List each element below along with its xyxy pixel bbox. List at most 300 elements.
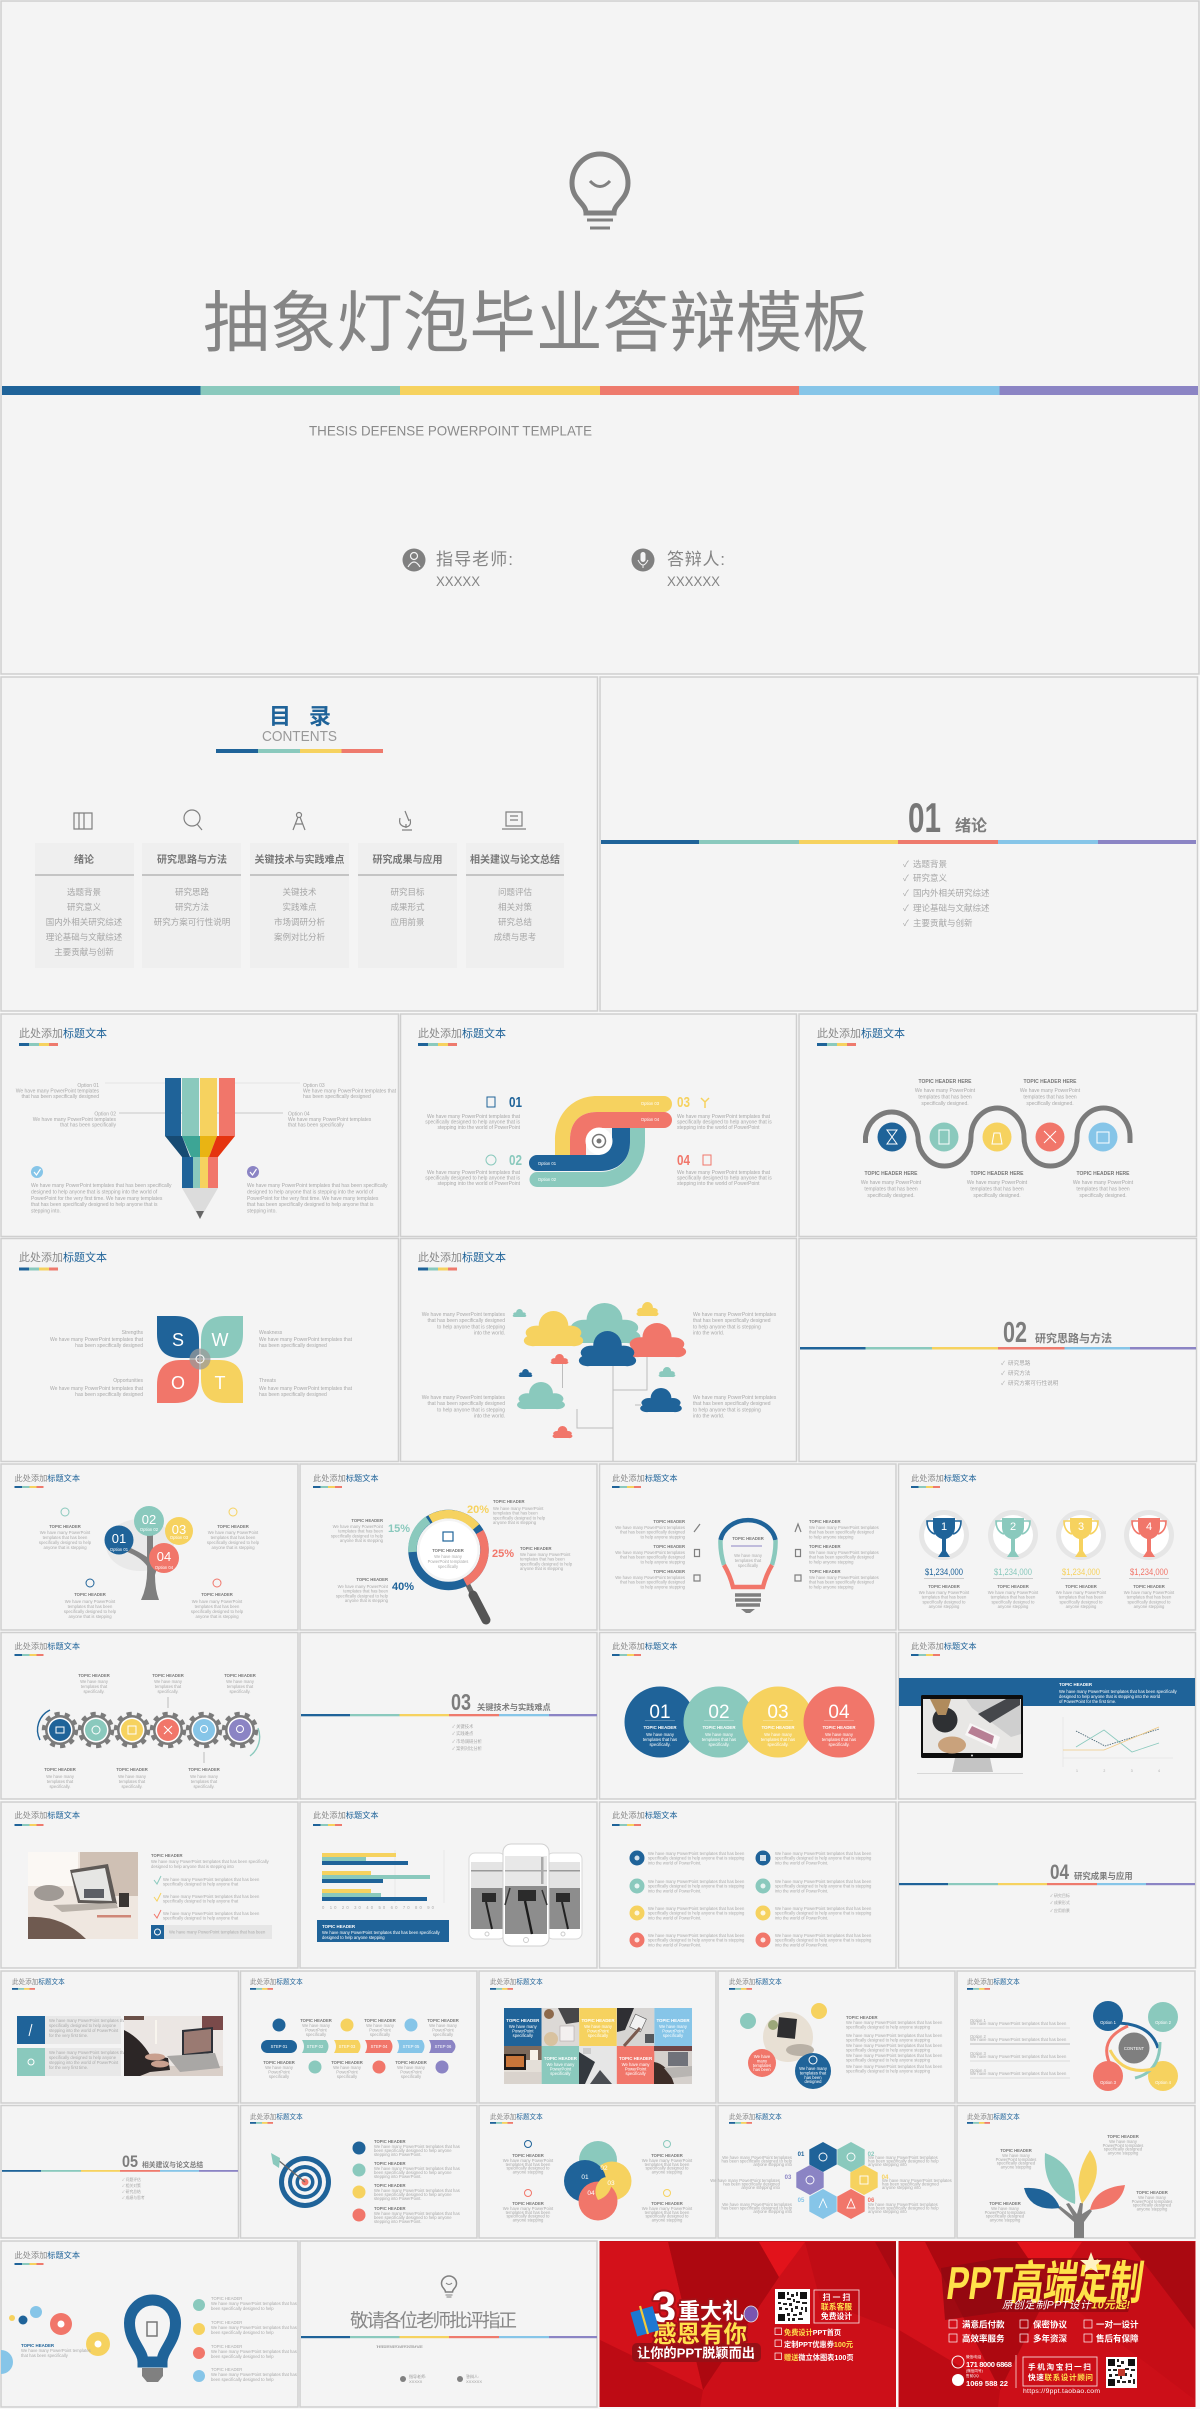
mini bar — [612, 1824, 641, 1826]
panel: venn diagram — [479, 2106, 716, 2238]
wave line — [866, 1108, 1130, 1166]
mini bar — [817, 1043, 856, 1046]
note blocks: specifically designed to help anyone — [49, 2055, 117, 2060]
chain segments: STEP 02 — [307, 2044, 324, 2049]
mini bar — [418, 1043, 457, 1046]
circle 04: TOPIC HEADER — [822, 1725, 856, 1730]
chain segments: STEP 03 — [339, 2044, 356, 2049]
left items: to help anyone stepping — [641, 1534, 686, 1539]
right items: TOPIC HEADER — [809, 1519, 841, 1524]
wave labels: TOPIC HEADER HERE — [1024, 1079, 1077, 1085]
mini bar — [911, 1486, 940, 1488]
defender block: 答辩人: — [667, 550, 725, 569]
cloud text: to help anyone that is stepping — [437, 1407, 505, 1413]
wave labels: We have many PowerPoint — [861, 1180, 922, 1186]
side list: Option 3 — [970, 2051, 987, 2056]
circle 04: 04 — [828, 1702, 850, 1723]
cloud text — [422, 1312, 777, 1420]
target items: been specifically designed to help anyone — [374, 2192, 452, 2197]
wave labels: We have many PowerPoint — [967, 1180, 1028, 1186]
scan box: 联系客服 — [821, 2302, 852, 2312]
mosaic text: specifically — [513, 2033, 534, 2038]
side list: Option 2 — [970, 2034, 987, 2039]
checklist text: We have many PowerPoint templates that has been specifically — [151, 1859, 270, 1864]
column: 相关建议与论文总结: 问题评估 — [498, 887, 532, 897]
wave labels: templates that has been — [1076, 1186, 1130, 1192]
right items: to help anyone stepping — [809, 1559, 854, 1564]
paragraphs: designed to help anyone that is stepping into the world of — [31, 1189, 158, 1195]
list: ✓ 相关对策 — [122, 2183, 141, 2188]
advisor block — [402, 548, 513, 589]
bulb note: We have many PowerPoint templates — [21, 2348, 91, 2353]
side list: We have many PowerPoint templates that has been — [970, 2054, 1067, 2059]
right items: We have many PowerPoint templates that has — [211, 2349, 297, 2354]
side list: Option 4 — [970, 2068, 987, 2073]
hexagon text: We have many PowerPoint templates — [868, 2155, 938, 2160]
checklist text: specifically designed to help anyone that — [163, 1898, 239, 1904]
hexagons — [796, 2142, 878, 2219]
right items: that has been specifically designed — [809, 1530, 875, 1535]
chain text: TOPIC HEADER — [364, 2018, 396, 2023]
target items: been specifically designed to help anyone — [374, 2170, 452, 2175]
defender block: XXXXXX — [667, 574, 720, 589]
QR code — [1106, 2357, 1137, 2388]
trophy 4: templates that has been — [1127, 1595, 1172, 1600]
chain text: specifically — [269, 2074, 290, 2079]
circle 02: specifically. — [708, 1742, 730, 1747]
chain text — [263, 2018, 459, 2079]
blue bulb — [130, 2300, 176, 2382]
chain segments: STEP 05 — [403, 2044, 420, 2049]
chain segments — [261, 2018, 456, 2074]
slide title: 此处添加标题文本 — [612, 1641, 678, 1651]
item text: specifically designed to help anyone that is stepping — [648, 1856, 745, 1861]
item text: specifically designed to help anyone that is stepping — [648, 1884, 745, 1889]
cycle diagram: CONTENT — [1124, 2046, 1145, 2051]
tree labels: We have many PowerPoint — [65, 1599, 116, 1604]
venn text: specifically designed to — [645, 2214, 689, 2219]
chain text: PowerPoint — [369, 2028, 392, 2032]
item text — [648, 1851, 872, 1947]
column: 相关建议与论文总结: 相关建议与论文总结 — [470, 853, 560, 866]
swot labels: We have many PowerPoint templates that — [259, 1386, 353, 1392]
side list — [970, 2018, 1070, 2078]
venn text: templates that has been — [645, 2162, 690, 2167]
item text: into the world of PowerPoint. — [775, 1888, 828, 1893]
item text: We have many PowerPoint templates that has been — [775, 1879, 872, 1884]
panel: four circles — [600, 1632, 896, 1799]
tree labels — [39, 1508, 260, 1619]
paragraphs: We have many PowerPoint templates that has been specifically — [247, 1183, 388, 1189]
trophy 4 — [1124, 1510, 1175, 1609]
chain text: TOPIC HEADER — [300, 2018, 332, 2023]
item text: We have many PowerPoint templates that has been — [648, 1851, 745, 1856]
colour bar — [800, 1347, 1196, 1350]
chain text: We have many — [397, 2065, 426, 2070]
slide title: 此处添加标题文本 — [911, 1641, 977, 1651]
tree labels: We have many PowerPoint — [192, 1599, 243, 1604]
bulb text: templates that — [735, 1558, 762, 1563]
venn circles: 04 — [587, 2190, 595, 2197]
slide title: 此处添加标题文本 — [490, 2112, 543, 2121]
trophy 3: TOPIC HEADER — [1065, 1584, 1097, 1589]
circle cluster: templates that — [800, 2070, 827, 2075]
body text: We have many PowerPoint templates that — [677, 1170, 771, 1176]
wave labels: TOPIC HEADER HERE — [865, 1171, 918, 1177]
stems — [562, 1357, 647, 1461]
wave labels: templates that has been — [864, 1186, 918, 1192]
checklist text: specifically designed to help anyone that — [163, 1916, 239, 1920]
cycle diagram: Option 2 — [1155, 2020, 1172, 2025]
tree: Option 04 — [155, 1565, 174, 1570]
tree labels: TOPIC HEADER — [49, 1524, 81, 1529]
tree labels: specifically designed to help — [39, 1540, 92, 1545]
side text: specifically designed to help anyone stepping — [846, 2058, 931, 2063]
swot labels: has been specifically designed — [75, 1343, 143, 1349]
leaf text: We have many — [1002, 2153, 1031, 2158]
checklist text: We have many PowerPoint templates that has been — [163, 1894, 260, 1899]
panel: contents — [1, 677, 598, 1011]
list — [1050, 1892, 1070, 1913]
list: 研究方法 — [1008, 1369, 1031, 1377]
left items: We have many PowerPoint templates — [615, 1525, 685, 1530]
list: ✓ 案例对比分析 — [452, 1745, 483, 1752]
chain segments: STEP 04 — [371, 2044, 388, 2049]
mini bar — [967, 1988, 990, 1990]
callout text: TOPIC HEADER — [493, 1499, 525, 1504]
trophy 4: TOPIC HEADER — [1133, 1584, 1165, 1589]
list: 研究方案可行性说明 — [1008, 1379, 1059, 1387]
contact details — [952, 2354, 1016, 2388]
scan box — [1023, 2357, 1097, 2386]
column: 关键技术与实践难点: 实践难点 — [282, 902, 317, 912]
section number: 04 — [1050, 1861, 1069, 1884]
circle 03 — [742, 1686, 814, 1758]
bulb — [720, 1520, 776, 1613]
right items: been specifically designed to help — [211, 2354, 274, 2359]
mini bar — [19, 1043, 58, 1046]
icon: gift box — [630, 2306, 659, 2336]
leaf text: anyone stepping — [1108, 2150, 1139, 2155]
bulb text: TOPIC HEADER — [732, 1536, 764, 1541]
leaf text: We have many — [1109, 2139, 1138, 2144]
body text: We have many PowerPoint templates that — [677, 1114, 771, 1120]
venn text: TOPIC HEADER — [512, 2153, 544, 2158]
mini bar — [14, 2263, 44, 2265]
swot labels: Threats — [259, 1378, 276, 1384]
side text: We have many PowerPoint templates that has been — [846, 2020, 943, 2025]
hexagon text: anyone stepping into — [882, 2185, 921, 2190]
leaf text: We have many — [1138, 2195, 1167, 2200]
checklist text — [151, 1853, 270, 1920]
gift headline: 让你的PPT脱颖而出 — [637, 2344, 755, 2360]
slide title: 此处添加标题文本 — [729, 2112, 782, 2121]
magnifier: TOPIC HEADER — [432, 1548, 464, 1553]
mini bar — [19, 1268, 58, 1270]
headline — [941, 2252, 1147, 2320]
trophy 3 — [1056, 1510, 1107, 1609]
trophy 1: $1,234,000 — [925, 1567, 963, 1578]
options text — [16, 1083, 397, 1128]
slide title: 此处添加标题文本 — [967, 2112, 1020, 2121]
note blocks: stepping into the world of PowerPoint — [49, 2028, 119, 2033]
tree labels: We have many PowerPoint — [40, 1530, 91, 1535]
target items: stepping into PowerPoint. — [374, 2152, 422, 2157]
leaf text: specifically designed — [1104, 2147, 1143, 2152]
circle 03: 03 — [767, 1702, 789, 1723]
item text: specifically designed to help anyone that is stepping — [775, 1938, 872, 1943]
options text: We have many PowerPoint templates — [33, 1117, 116, 1123]
tree labels: templates that has been — [43, 1535, 88, 1540]
list — [122, 2177, 145, 2200]
venn text: templates that has been — [645, 2210, 690, 2215]
right items: been specifically designed to help — [211, 2330, 274, 2335]
hexagon text: has been specifically designed to help — [721, 2159, 793, 2164]
panel: red promo custom design — [898, 2241, 1196, 2407]
slide title: 此处添加标题文本 — [612, 1473, 678, 1483]
chain text: specifically — [337, 2074, 358, 2079]
chain text: specifically — [370, 2032, 391, 2037]
venn circles: 03 — [607, 2180, 615, 2187]
numbered items — [486, 1094, 711, 1169]
list: 研究思路 — [1008, 1359, 1031, 1367]
side list: We have many PowerPoint templates that has been — [970, 2071, 1067, 2076]
hexagon text: We have many PowerPoint templates — [722, 2155, 792, 2160]
options text: Option 03 — [303, 1083, 325, 1089]
venn circles — [564, 2141, 632, 2220]
options text: that has been specifically — [60, 1122, 116, 1128]
slide title: 此处添加标题文本 — [12, 1977, 65, 1986]
panel: section 04 — [898, 1802, 1196, 1968]
chain text: PowerPoint — [432, 2028, 455, 2032]
bulb note — [21, 2343, 91, 2358]
mini bar — [250, 1988, 273, 1990]
checklist text: We have many PowerPoint templates that has been — [163, 1911, 260, 1916]
cloud text: that has been specifically designed — [693, 1318, 771, 1324]
chart note: We have many PowerPoint templates that has been specifically — [322, 1930, 441, 1935]
mosaic text: specifically — [588, 2033, 609, 2038]
gear labels: templates that — [227, 1684, 254, 1689]
body text: specifically designed to help anyone that is — [677, 1119, 772, 1125]
right items: We have many PowerPoint templates — [809, 1550, 879, 1555]
leaf text: PowerPoint templates — [1132, 2199, 1172, 2204]
side text: specifically designed to help anyone stepping — [846, 2069, 931, 2074]
hexagon text: anyone stepping into — [753, 2209, 793, 2214]
bar chart — [322, 1850, 444, 1910]
slide title: 此处添加标题文本 — [19, 1250, 107, 1264]
service checklist: 高效率服务 — [962, 2334, 1005, 2344]
gear labels: specifically. — [229, 1689, 251, 1694]
circle 01: specifically. — [649, 1742, 671, 1747]
section title: 研究成果与应用 — [1074, 1871, 1133, 1881]
options text: Option 01 — [77, 1083, 99, 1089]
target icon — [271, 2153, 331, 2208]
list: ✓ — [1001, 1380, 1005, 1387]
slide title: 此处添加标题文本 — [490, 1977, 543, 1986]
callout text: We have many PowerPoint — [333, 1524, 384, 1529]
list: ✓ — [903, 859, 909, 869]
people: 指导老师: — [409, 2373, 426, 2379]
gift list: 赠送微立体图表100页 — [784, 2353, 854, 2362]
gear labels: TOPIC HEADER — [44, 1767, 76, 1772]
slide title: 此处添加标题文本 — [14, 2250, 80, 2260]
circle cluster: We have — [754, 2054, 771, 2059]
body text — [425, 1114, 772, 1187]
venn text: TOPIC HEADER — [651, 2201, 683, 2206]
gift headline: 感恩有你 — [653, 2320, 747, 2347]
mosaic text: TOPIC HEADER — [619, 2056, 653, 2061]
band diagram: Option 03 — [641, 1101, 660, 1106]
tree labels: anyone that is stepping — [211, 1545, 255, 1550]
right items: TOPIC HEADER — [211, 2296, 242, 2301]
subtitle: THESIS DEFENSE POWERPOINT TEMPLATE — [309, 422, 592, 438]
body text: specifically designed to help anyone that is — [425, 1175, 520, 1181]
hexagon text: We have many PowerPoint templates — [710, 2178, 780, 2183]
colour bar — [216, 749, 383, 753]
chain text: We have many — [429, 2023, 458, 2028]
line chart — [1063, 1717, 1173, 1767]
column: 相关建议与论文总结: 相关对策 — [498, 902, 532, 912]
numbered items: 04 — [677, 1152, 691, 1169]
callout text: anyone that is stepping — [520, 1566, 564, 1571]
note blocks: We have many PowerPoint templates that — [49, 2018, 128, 2023]
left items — [615, 1519, 700, 1589]
trophy 2: specifically designed to — [991, 1599, 1035, 1604]
left items: We have many PowerPoint templates — [615, 1575, 685, 1580]
callout text: specifically designed to help — [520, 1561, 573, 1566]
column: 研究思路与方法: 研究方案可行性说明 — [154, 917, 230, 927]
magnifier: PowerPoint templates — [428, 1559, 468, 1564]
left items: that has been specifically designed — [620, 1530, 686, 1535]
colour bar — [301, 1714, 597, 1716]
list: 选题背景 — [913, 859, 947, 869]
right items: We have many PowerPoint templates that has — [211, 2325, 297, 2330]
list: 研究意义 — [913, 873, 948, 883]
mini bar — [967, 2122, 990, 2124]
item text: into the world of PowerPoint. — [648, 1915, 701, 1920]
gear labels: specifically. — [49, 1784, 71, 1789]
item text: specifically designed to help anyone that is stepping — [775, 1884, 872, 1889]
numbered items: 03 — [677, 1094, 690, 1111]
options text: Option 04 — [288, 1112, 310, 1118]
icon: small bulb — [442, 2276, 456, 2297]
panel: section 01 — [600, 677, 1198, 1011]
venn circles: 01 — [581, 2174, 589, 2181]
mosaic text: PowerPoint — [625, 2066, 647, 2072]
circle 04: specifically. — [828, 1742, 850, 1747]
blue band: designed to help anyone that is stepping into the world — [1059, 1694, 1161, 1699]
leaf text: TOPIC HEADER — [1107, 2134, 1139, 2139]
chain text: specifically — [306, 2032, 327, 2037]
gift headline: 重大礼 — [678, 2299, 744, 2324]
venn text: We have many PowerPoint — [503, 2206, 554, 2211]
target items: been specifically designed to help anyone — [374, 2215, 452, 2220]
chain text: PowerPoint — [400, 2070, 423, 2074]
leaf text: We have many — [991, 2206, 1020, 2211]
heading: 目 录 — [269, 704, 331, 729]
band diagram — [529, 1096, 672, 1187]
chain text: We have many — [366, 2023, 395, 2028]
target items: been specifically designed to help anyone — [374, 2148, 452, 2153]
body text: stepping into the world of PowerPoint — [437, 1125, 521, 1131]
mini bar — [14, 1486, 44, 1488]
panel: SWOT — [1, 1238, 398, 1462]
chart labels: 1 2 3 4 — [1076, 1769, 1160, 1773]
list: ✓ 问题评估 — [122, 2177, 141, 2182]
scan box — [814, 2290, 859, 2323]
leaf text: anyone stepping — [990, 2217, 1021, 2222]
bulb text: specifically — [738, 1563, 759, 1568]
callout text: TOPIC HEADER — [351, 1518, 383, 1523]
trophy 4: specifically designed to — [1127, 1599, 1171, 1604]
list — [452, 1723, 483, 1752]
numbered items: 02 — [509, 1152, 522, 1169]
bulb note: that has been specifically — [21, 2353, 69, 2358]
side text — [846, 2015, 943, 2074]
colour bar — [2, 2170, 238, 2172]
item text: specifically designed to help anyone that is stepping — [648, 1938, 745, 1943]
paragraphs: that has been specifically designed to help anyone that is — [31, 1202, 158, 1208]
mosaic text: We have many — [546, 2062, 575, 2067]
cloud text: to help anyone that is stepping — [693, 1407, 761, 1413]
body text: We have many PowerPoint templates that — [427, 1170, 521, 1176]
mini bar — [729, 2122, 752, 2124]
chart note: TOPIC HEADER — [322, 1924, 356, 1929]
slide title: 此处添加标题文本 — [14, 1641, 80, 1651]
item text: into the world of PowerPoint. — [648, 1942, 701, 1947]
cloud text: that has been specifically designed — [427, 1401, 505, 1407]
tree labels: TOPIC HEADER — [74, 1592, 106, 1597]
panel: eight icon items — [600, 1802, 896, 1968]
list: ✓ 应用前景 — [1050, 1907, 1070, 1913]
venn circles: 02 — [600, 2165, 608, 2172]
note blocks: We have many PowerPoint templates that — [49, 2050, 128, 2055]
circle 02: 02 — [708, 1702, 730, 1723]
column: 关键技术与实践难点: 案例对比分析 — [274, 932, 325, 942]
colour bar — [601, 840, 1196, 844]
item text: specifically designed to help anyone that is stepping — [775, 1856, 872, 1861]
circle cluster: many — [757, 2058, 768, 2063]
hexagon text: We have many PowerPoint templates — [868, 2202, 938, 2207]
check icon left — [31, 1166, 43, 1178]
right items: TOPIC HEADER — [211, 2344, 242, 2349]
hexagon numbers: 06 — [868, 2198, 875, 2204]
column: 绪论: 理论基础与文献综述 — [46, 932, 123, 942]
venn text: templates that has been — [506, 2210, 551, 2215]
cycle diagram: Option 4 — [1155, 2080, 1172, 2085]
chain text: PowerPoint — [268, 2070, 291, 2074]
magnifier: specifically — [438, 1564, 459, 1569]
column: 关键技术与实践难点: 关键技术与实践难点 — [254, 853, 344, 866]
trophy 4: anyone stepping — [1134, 1604, 1165, 1609]
cloud text: into the world. — [474, 1331, 505, 1337]
cloud text: We have many PowerPoint templates — [693, 1395, 777, 1401]
list: ✓ 成果形式 — [1050, 1899, 1070, 1905]
target items: We have many PowerPoint templates that has — [374, 2211, 460, 2216]
target items: stepping into PowerPoint. — [374, 2196, 422, 2201]
tree labels: TOPIC HEADER — [201, 1592, 233, 1597]
advisor block: 指导老师: — [436, 550, 513, 569]
trophy 1: templates that has been — [922, 1595, 967, 1600]
column: 关键技术与实践难点: 关键技术 — [282, 887, 317, 897]
section title: 相关建议与论文总结 — [142, 2160, 203, 2169]
options text: that has been specifically designed — [21, 1094, 99, 1100]
column: 研究思路与方法 — [142, 810, 241, 968]
gear labels: templates that — [191, 1779, 218, 1784]
cloud text: into the world. — [474, 1414, 505, 1420]
slide title: 此处添加标题文本 — [612, 1810, 678, 1820]
options text: that has been specifically — [288, 1122, 344, 1128]
